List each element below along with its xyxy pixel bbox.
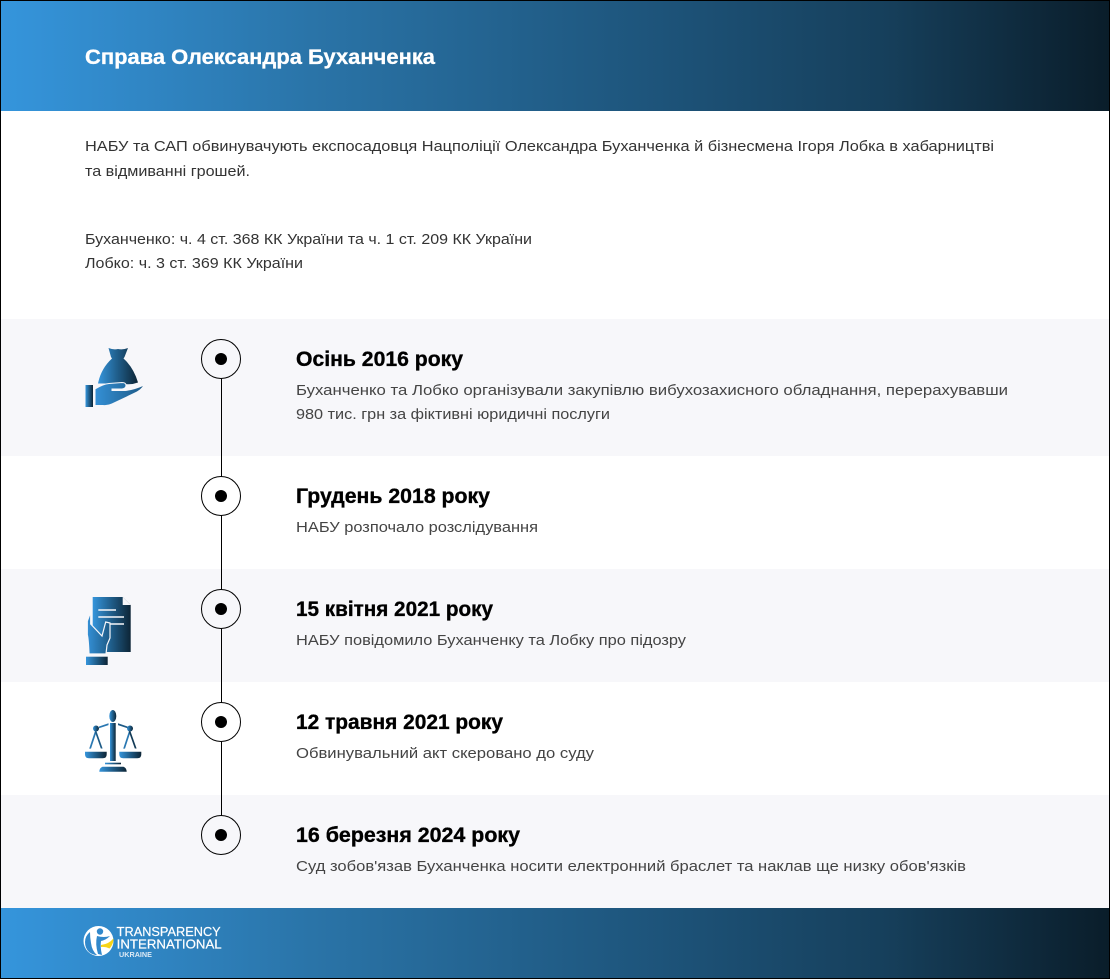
event 5 (296, 824, 966, 875)
event 5: 16 березня 2024 року (296, 824, 520, 847)
event 2: Грудень 2018 року (296, 485, 490, 508)
event 2: НАБУ розпочало розслідування (296, 519, 538, 536)
logo: Transparency International Ukraine: INTERNATIONAL (117, 938, 222, 952)
marker 5 (202, 816, 240, 854)
event 3: НАБУ повідомило Буханченку та Лобку про підозру (296, 632, 687, 649)
row band: 16 March 2024 (1, 795, 1109, 908)
event 1: Буханченко та Лобко організували закупівлю вибухозахисного обладнання, перерахувавши (296, 382, 1008, 399)
event 1: 980 тис. грн за фіктивні юридичні послуги (296, 406, 610, 423)
row band: 15 April 2021 (1, 569, 1109, 682)
event 5: Суд зобов'язав Буханченка носити електронний браслет та наклав ще низку обов'язків (296, 858, 966, 875)
icon: money bag in hand (86, 348, 144, 407)
event 4: Обвинувальний акт скеровано до суду (296, 745, 595, 762)
marker 3 (202, 590, 240, 628)
charges text: Лобко: ч. 3 ст. 369 КК України (85, 255, 303, 272)
icon: hand holding document (86, 597, 131, 665)
logo: Transparency International Ukraine: UKRAINE (119, 952, 152, 959)
marker 4 (202, 702, 240, 742)
event 4 (296, 711, 595, 762)
event 3: 15 квітня 2021 року (296, 598, 493, 621)
intro text: НАБУ та САП обвинувачують експосадовця Нацполіції Олександра Буханченка й бізнесмена Ігоря Лобка в хабарництві (85, 138, 994, 155)
event 1: Осінь 2016 року (296, 348, 463, 371)
event 4: 12 травня 2021 року (296, 711, 503, 734)
event 2 (296, 485, 538, 536)
header banner (1, 1, 1109, 111)
footer banner (1, 908, 1109, 978)
charges text (85, 231, 532, 272)
intro text (85, 138, 994, 180)
marker 2 (202, 476, 240, 516)
charges text: Буханченко: ч. 4 ст. 368 КК України та ч. 1 ст. 209 КК України (85, 231, 532, 248)
event 1 (296, 348, 1008, 423)
row band: autumn 2016 (1, 319, 1109, 456)
logo: Transparency International Ukraine: TRANSPARENCY (117, 925, 221, 939)
intro text: та відмиванні грошей. (85, 163, 250, 180)
icon: scales of justice (85, 710, 141, 772)
event 3 (296, 598, 687, 649)
marker 1 (202, 340, 240, 378)
timeline (202, 340, 240, 854)
title: Справа Олександра Буханченка (85, 46, 435, 69)
logo: Transparency International Ukraine (84, 925, 222, 959)
